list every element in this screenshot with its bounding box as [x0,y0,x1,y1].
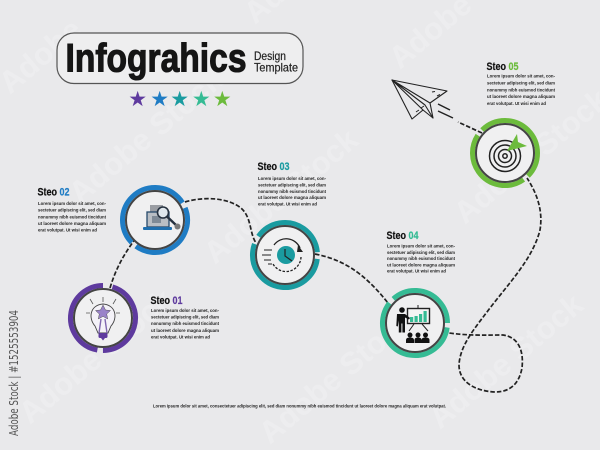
step 02 text: Lorem ipsum dolor sit amet, con- [38,201,106,206]
step 04 node [369,277,461,369]
infographic canvas: Adobe Stock [422,286,590,435]
rating stars: ★ [128,87,147,111]
step 02 text: nonummy nibh euismod tincidunt [38,214,106,219]
icon: clock [262,239,303,272]
step 02 node [109,174,201,266]
rating stars: ★ [192,87,211,111]
step 05 text: sectetuer adipiscing elit, sed diam [487,80,555,85]
step 02 text: sectetuer adipiscing elit, sed diam [38,208,106,213]
footer text: Lorem ipsum dolor sit amet, consectetuer adipiscing elit, sed diam nonummy nibh euismod tincidunt ut laoreet dolore magna aliquam erat volutpat. [153,404,446,408]
step 04 text: nonummy nibh euismod tincidunt [387,256,455,261]
dashed route [110,104,541,392]
step 01 text: nonummy nibh euismod tincidunt [151,321,219,326]
icon: presenter with chart [396,305,430,343]
step 04 text [386,230,455,274]
step 04 text: Steo 04 [386,230,419,242]
stock id caption: Adobe Stock | #1525553904 [7,310,21,436]
step 04 text: Lorem ipsum dolor sit amet, con- [387,244,455,248]
infographic canvas: Adobe Stock [252,301,420,450]
step 05 text: ut laoreet dolore magna aliquam [487,94,555,99]
step 01 node [62,277,144,359]
icon: paper plane [392,80,447,119]
step 05 text: erat volutpat. Ut wisi enim ad [487,101,546,106]
step 05 text: Steo 05 [486,61,518,73]
icon: laptop and magnifier [143,205,180,230]
infographic canvas: Adobe Stock [12,281,180,430]
title badge: Infograhics [66,36,246,80]
step 05 text [486,61,555,106]
rating stars: ★ [150,87,169,111]
step 02 text: ut laoreet dolore magna aliquam [38,221,106,226]
rating stars: ★ [170,87,189,111]
step 02 text: erat volutpat. Ut wisi enim ad [38,228,97,233]
step 01 text: sectetuer adipiscing elit, sed diam [151,315,219,320]
step 03 text: sectetuer adipiscing elit, sed diam [258,182,326,187]
step 03 text [258,161,326,207]
step 02 text: Steo 02 [38,187,70,199]
step 02 text [38,187,106,233]
step 03 text: erat volutpat. Ut wisi enim ad [258,202,317,207]
step 03 text: ut laoreet dolore magna aliquam [258,195,326,200]
step 01 text: erat volutpat. Ut wisi enim ad [151,334,210,339]
step 04 text: ut laoreet dolore magna aliquam [387,262,455,267]
step 04 text: sectetuer adipiscing elit, sed diam [387,250,455,255]
icon: target [490,134,527,172]
infographic canvas: Adobe Stock [197,121,365,270]
step 01 text: ut laoreet dolore magna aliquam [151,328,219,333]
title badge: Design [254,49,286,63]
rating stars: ★ [213,87,232,111]
step 05 node [459,107,551,199]
infographic canvas: Adobe Stock [62,61,230,210]
step 01 text: Steo 01 [150,295,182,307]
icon: light bulb [86,297,120,340]
step 04 text: erat volutpat. Ut wisi enim ad [387,269,446,274]
step 01 text: Lorem ipsum dolor sit amet, con- [151,308,219,313]
rating stars [128,87,232,111]
title badge: Template [254,60,298,74]
step 05 text: nonummy nibh euismod tincidunt [487,87,555,92]
step 03 text: Steo 03 [258,161,290,173]
step 05 text: Lorem ipsum dolor sit amet, con- [487,74,555,78]
step 03 text: Lorem ipsum dolor sit amet, con- [258,176,326,181]
step 01 text [150,295,219,339]
step 03 text: nonummy nibh euismod tincidunt [258,189,326,194]
step 03 node [240,210,330,300]
